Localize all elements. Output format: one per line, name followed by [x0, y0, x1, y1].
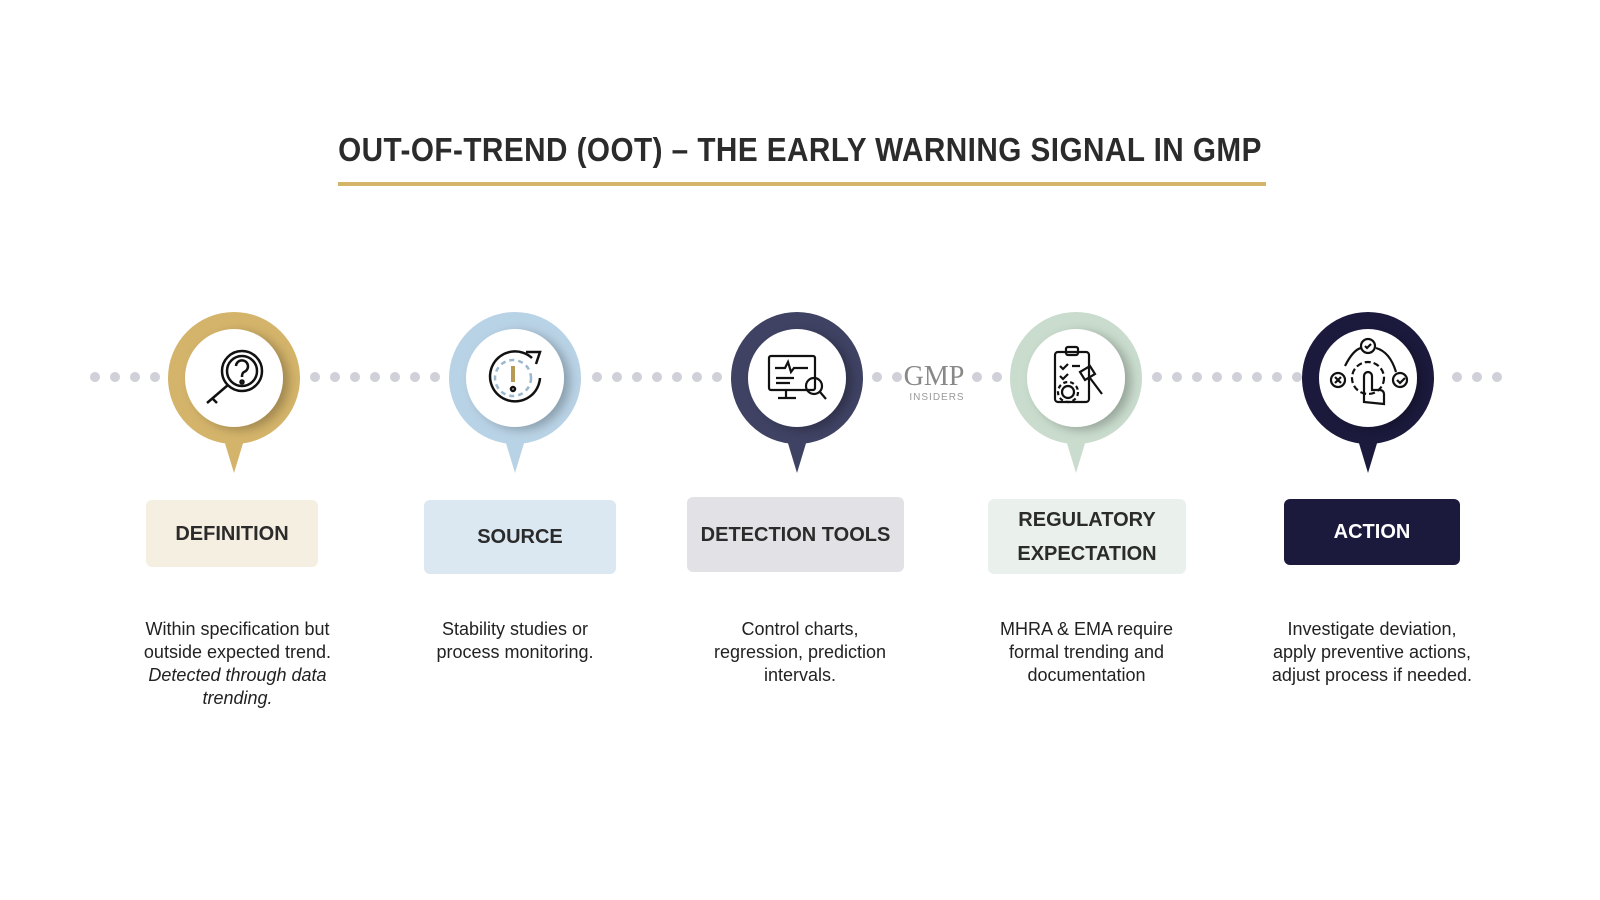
box: regulatory expectation: EXPECTATION [1017, 542, 1157, 564]
text: definition: Within specification but outside expected trend. Detected through data trending. [144, 619, 331, 708]
logo: GMP insiders: INSIDERS [909, 392, 965, 403]
icon: refresh alert [490, 351, 540, 401]
box: detection tools: DETECTION TOOLS [701, 524, 890, 546]
box: action: ACTION [1334, 521, 1410, 543]
logo: GMP insiders: GMP [904, 361, 964, 392]
pin: regulatory [1010, 312, 1142, 473]
icon: monitor magnifier [769, 356, 826, 399]
text: action: Investigate deviation, apply preventive actions, adjust process if needed. [1272, 619, 1472, 685]
title underline [338, 182, 1266, 186]
box: regulatory expectation: REGULATORY [1018, 508, 1156, 530]
icon: magnifier question [207, 351, 262, 403]
box: detection tools [687, 497, 904, 572]
box: definition: DEFINITION [175, 522, 289, 544]
box: regulatory expectation [988, 499, 1186, 574]
box: action [1284, 499, 1460, 565]
box: source: SOURCE [477, 526, 563, 548]
pin: definition [168, 312, 300, 473]
box: definition [146, 500, 318, 567]
box: source [424, 500, 616, 574]
icon: clipboard gavel [1055, 347, 1102, 402]
icon: gear hand [1331, 339, 1407, 404]
title: OUT-OF-TREND (OOT) – THE EARLY WARNING SIGNAL IN GMP [338, 131, 1262, 168]
text: detection: Control charts, regression, prediction intervals. [714, 619, 886, 685]
pin: detection tools [731, 312, 863, 473]
pin: source [449, 312, 581, 473]
text: source: Stability studies or process monitoring. [436, 619, 594, 662]
text: regulatory: MHRA & EMA require formal trending and documentation [1000, 619, 1173, 685]
pin: action [1302, 312, 1434, 473]
